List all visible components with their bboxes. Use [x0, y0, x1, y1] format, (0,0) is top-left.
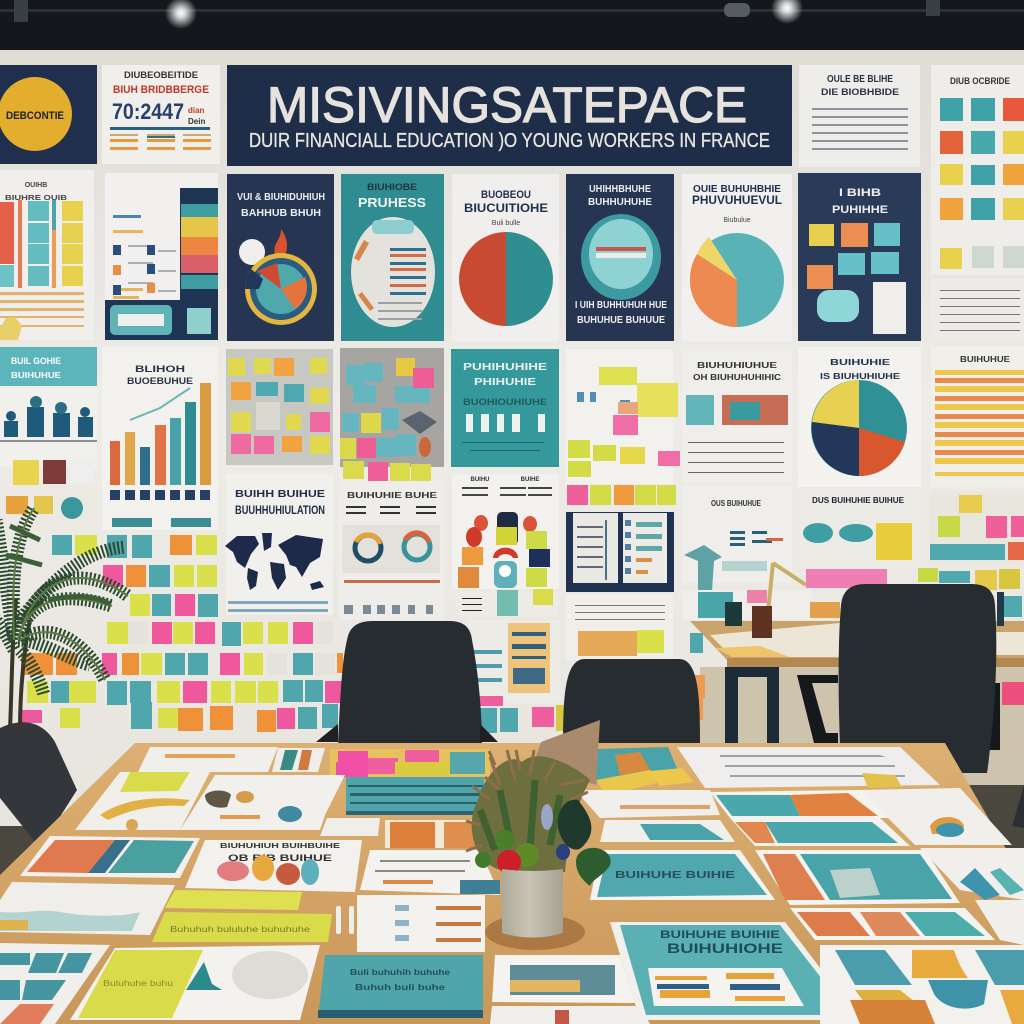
poster: pie four slices: IS BIUHUHIUHE	[820, 372, 901, 381]
poster: navy gauge: I UIH BUHHUHUH HUE	[575, 300, 667, 311]
poster: teal report: BIUHIOBE	[367, 182, 417, 192]
poster: world map: BUUHHUHIULATION	[235, 503, 325, 517]
pink notes	[20, 565, 343, 729]
poster: figures: BIUH BRIDBBERGE	[113, 84, 209, 96]
poster: bar chart: BUOEBUHUE	[127, 376, 193, 386]
poster: striped table: BUIHUHUE	[960, 355, 1011, 364]
banner heading: MISIVINGSATEPACE	[267, 77, 747, 133]
lower posters behind chairs	[468, 595, 673, 733]
table: left mid papers: OB BIB BUIHUE	[228, 853, 332, 863]
sticky notes wall field	[20, 535, 343, 732]
pink note under sticky board	[368, 462, 388, 481]
poster: teal skyline: PHIHUHIE	[474, 377, 536, 388]
table: bottom left papers	[0, 943, 650, 1024]
poster: pie four slices	[798, 347, 921, 487]
foliage	[466, 750, 611, 886]
table: teal report bottom right	[610, 922, 860, 1020]
table: right papers: BUIHUHE BUIHIE	[615, 870, 735, 881]
poster: bar chart	[102, 347, 218, 530]
chair: middle right	[563, 659, 700, 745]
poster: people	[0, 347, 97, 485]
title banner	[227, 65, 792, 166]
poster: lower stripes and notes	[458, 589, 558, 617]
table: middle papers	[320, 818, 500, 952]
poster: top right text: OULE BE BLIHE	[827, 74, 893, 85]
poster: navy with notes	[798, 173, 921, 341]
poster: figures: dian	[188, 106, 205, 115]
right desk	[690, 563, 1024, 785]
poster: top right text	[799, 65, 920, 167]
table: left mid papers	[0, 772, 362, 942]
poster: lower teal strip	[682, 590, 840, 620]
poster: report white: OH BIUHUHUHIHIC	[693, 373, 781, 382]
poster: teal report	[341, 174, 444, 341]
poster: navy gauge: BUHUHUE BUHUUE	[577, 315, 665, 326]
poster: yellow circle: DEBCONTIE	[6, 110, 64, 122]
orange notes	[21, 535, 343, 732]
vase with plant	[466, 750, 611, 950]
pale notes	[128, 622, 335, 675]
poster: teal report: PRUHESS	[358, 195, 426, 210]
poster: small left notes	[0, 486, 97, 531]
poster: half pie	[452, 174, 559, 341]
table: bottom left papers: Buluhuhe buhu	[103, 979, 173, 988]
poster: navy with notes: I BIHB	[839, 187, 881, 199]
poster: characters	[452, 474, 559, 589]
poster: world map: BUIHH BUIHUE	[235, 489, 325, 500]
ceiling	[0, 0, 1024, 50]
table: right papers	[575, 788, 1024, 945]
poster: figures: 70:2447	[112, 99, 184, 124]
poster: left notes: BIUHRE OUIB	[5, 195, 67, 202]
laptop	[533, 720, 600, 785]
teal notes	[51, 535, 338, 729]
plant: left wall	[0, 508, 128, 730]
poster: report white	[682, 349, 792, 483]
chair: right	[797, 584, 1000, 773]
poster: right colour grid: DIUB OCBRIDE	[950, 76, 1010, 86]
table: back row papers	[138, 720, 940, 815]
poster: bubbles: DUS BUIHUHIE BUIHUE	[812, 496, 905, 505]
poster: donut flame: VUI & BIUHIDUHIUH	[237, 192, 325, 203]
poster: navy gauge: UHIHHBHUHE	[589, 184, 651, 195]
poster: donut flame	[227, 174, 334, 341]
poster: left notes: OUIHB	[25, 182, 47, 189]
lime notes	[27, 535, 288, 728]
table: bottom left papers: Buhuh buli buhe	[355, 983, 446, 992]
poster: half pie: Buli bulle	[492, 220, 520, 227]
table: bottom left papers: Buli buhuhih buhuhe	[350, 968, 451, 977]
table: left mid papers: Buhuhuh bululuhe buhuhuhe	[170, 925, 311, 934]
row of notes above navy documents	[567, 485, 676, 505]
poster: people: BUIHUHUE	[11, 371, 62, 380]
poster: rings	[339, 481, 444, 620]
table: left mid papers: BIUHUHIUH BUIHBUIHE	[220, 843, 340, 850]
pink and yellow notes	[330, 749, 490, 777]
poster: figures	[102, 65, 220, 164]
table top	[0, 743, 1024, 1024]
poster: navy gauge: BUHHUHUHE	[588, 197, 652, 208]
poster: half pie: BIUCUITIOHE	[464, 201, 548, 215]
poster: donut flame: BAHHUB BHUH	[241, 208, 321, 219]
poster: characters: BUIHE	[521, 477, 539, 483]
poster: bar chart: BLIHOH	[135, 364, 185, 374]
notes under sticky board	[343, 461, 431, 482]
poster: report white: BIUHUHIUHUE	[697, 361, 778, 370]
chair: far right edge	[1012, 786, 1024, 828]
poster: list with colour column	[105, 173, 218, 340]
poster: right lower notes	[930, 492, 1024, 563]
banner subtitle: DUIR FINANCIALL EDUCATION )O YOUNG WORKERS IN FRANCE	[249, 130, 770, 152]
floor	[0, 782, 1024, 1024]
notes right of pink fold	[918, 568, 1022, 617]
poster: navy with notes: PUHIHHE	[832, 204, 888, 216]
poster: striped table	[931, 347, 1024, 487]
poster: table bottom right	[931, 278, 1024, 340]
poster: rings: BUIHUHIE BUHE	[347, 491, 438, 500]
poster: pie three slices: OUIE BUHUHBHIE	[693, 184, 781, 195]
poster: right colour grid	[931, 65, 1024, 275]
poster: half pie: BUOBEOU	[481, 189, 531, 201]
poster: figures: DIUBEOBEITIDE	[124, 70, 198, 80]
poster: house notes	[682, 486, 792, 591]
table: colour-block sheet bottom right	[820, 945, 1024, 1024]
poster: teal skyline: PUHIHUHIHE	[463, 362, 547, 373]
poster: bubbles	[798, 488, 922, 567]
poster: sticky board 2	[340, 348, 444, 467]
poster: characters: BUIHU	[470, 477, 490, 483]
poster: navy gauge	[566, 174, 674, 341]
poster: pie three slices: PHUVUHUEVUL	[692, 193, 782, 207]
poster: figures: Dein	[188, 117, 205, 126]
poster: yellow circle	[0, 65, 97, 164]
poster: people: BUIL GOHIE	[11, 356, 61, 366]
poster: sticky board 1	[226, 349, 333, 465]
poster: teal skyline	[451, 349, 559, 467]
poster: top right text: DIE BIOBHBIDE	[821, 87, 899, 97]
poster: pie four slices: BUIHUHIE	[830, 358, 891, 367]
table: teal report bottom right: BUIHUHIOHE	[667, 940, 783, 956]
poster: left notes	[0, 170, 94, 340]
wall	[0, 50, 1024, 830]
vase body	[502, 869, 563, 938]
table: teal report bottom right: BUIHUHE BUIHIE	[660, 929, 780, 941]
poster: navy documents	[566, 512, 674, 592]
poster: pie three slices: Biubulue	[723, 217, 751, 224]
poster: house notes: OUS BUIHUHUE	[711, 499, 762, 508]
poster: pie three slices	[682, 174, 792, 341]
chair: left	[0, 722, 77, 848]
poster: world map	[225, 474, 333, 615]
poster: teal skyline: BUOHIOUHIUHE	[463, 397, 547, 407]
chair: centre	[316, 621, 498, 746]
poster: white notes column	[566, 349, 680, 484]
